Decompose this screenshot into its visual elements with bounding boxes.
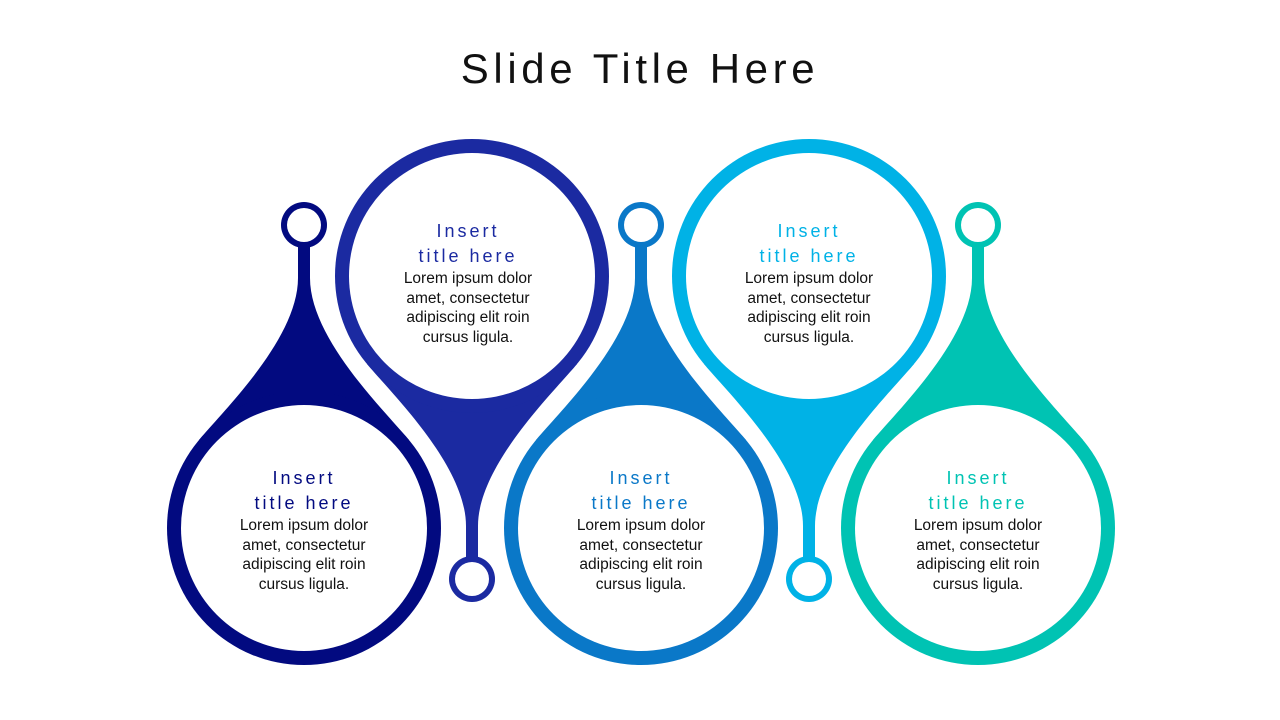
text block 2: Lorem ipsum dolor — [404, 270, 532, 287]
text block 4 — [745, 221, 873, 346]
text block 1: adipiscing elit roin — [242, 556, 366, 573]
text block 2: amet, consectetur — [406, 290, 530, 306]
text block 3: title here — [591, 493, 691, 513]
text block 4: Lorem ipsum dolor — [745, 270, 873, 287]
text block 3: amet, consectetur — [579, 536, 703, 554]
pin 2 — [335, 139, 609, 602]
text block 2: cursus ligula. — [423, 328, 513, 346]
text block 4: title here — [759, 246, 859, 266]
text block 5: adipiscing elit roin — [916, 556, 1040, 573]
text block 2: adipiscing elit roin — [406, 309, 530, 326]
text block 2 — [404, 221, 532, 346]
text block 1: Lorem ipsum dolor — [240, 517, 368, 534]
title: Slide Title Here — [461, 45, 819, 92]
pin 3 — [504, 202, 778, 665]
text block 2: title here — [418, 246, 518, 266]
text block 5: title here — [928, 493, 1028, 513]
text block 3: Lorem ipsum dolor — [577, 517, 705, 534]
text block 5: amet, consectetur — [916, 536, 1040, 554]
text block 1: title here — [254, 493, 354, 513]
text block 4: cursus ligula. — [764, 328, 854, 346]
text block 3: Insert — [609, 468, 673, 488]
text block 3 — [577, 468, 705, 592]
text block 5: cursus ligula. — [933, 576, 1023, 592]
pin 4 — [672, 139, 946, 602]
text block 1: Insert — [272, 468, 336, 488]
text block 3: cursus ligula. — [596, 576, 686, 592]
text block 1 — [240, 468, 368, 592]
text block 1: amet, consectetur — [242, 536, 366, 554]
text block 1: cursus ligula. — [259, 576, 349, 592]
text block 3: adipiscing elit roin — [579, 556, 703, 573]
text block 4: adipiscing elit roin — [747, 309, 871, 326]
text block 5: Lorem ipsum dolor — [914, 517, 1042, 534]
text block 2: Insert — [436, 221, 500, 241]
text block 4: amet, consectetur — [747, 290, 871, 306]
text block 5: Insert — [946, 468, 1010, 488]
text block 5 — [914, 468, 1042, 592]
pin 5 — [841, 202, 1115, 665]
pin 1 — [167, 202, 441, 665]
text block 4: Insert — [777, 221, 841, 241]
